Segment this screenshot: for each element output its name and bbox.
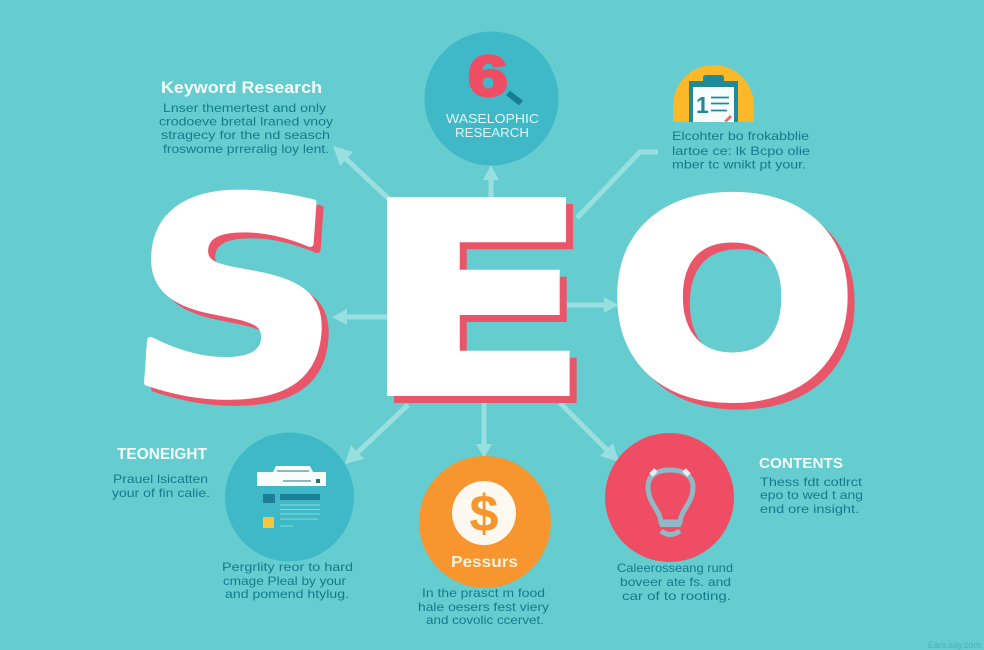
body text: car of to rooting. (622, 589, 731, 603)
circle (225, 432, 354, 562)
circle label (446, 112, 539, 140)
icon: document (257, 466, 326, 528)
panel: document circle (222, 432, 354, 601)
arrow: to keyword research (333, 146, 390, 200)
body text: and covolic ccervet. (426, 613, 544, 627)
body text: cmage Pleal by your (223, 574, 346, 588)
body text: Thess fdt cotlrct (760, 475, 863, 489)
letter shadows: S (126, 149, 360, 463)
body text: end ore insight. (760, 502, 859, 516)
icon: light bulb (648, 470, 693, 534)
panel: top research circle (424, 32, 558, 166)
letter shadows: E (369, 156, 596, 461)
letters: E (362, 149, 589, 454)
body text (222, 560, 353, 601)
body text: epo to wed t ang (760, 488, 863, 502)
panel: keyword research text (159, 78, 333, 156)
body text (418, 586, 549, 627)
circle (424, 32, 558, 166)
letter shadows (126, 149, 856, 463)
body text: In the prasct m food (422, 586, 545, 600)
arrow: up to top circle (483, 165, 499, 200)
circle label: RESEARCH (455, 126, 529, 140)
body text: lartoe ce: lk Bcpo olie (672, 144, 810, 158)
number six: 6 (468, 44, 508, 108)
body text: Pergrlity reor to hard (222, 560, 353, 574)
title: SEO (119, 143, 856, 463)
body text: crodoeve bretal lraned vnoy (159, 114, 333, 128)
watermark: Ears.say.com (928, 640, 981, 650)
icon: dollar coin: $ (470, 485, 499, 543)
body text: Caleerosseang rund (617, 561, 733, 575)
icon: dollar coin (452, 481, 516, 545)
circle (605, 433, 734, 562)
body text: and pomend htylug. (225, 587, 349, 601)
panel: pricing circle (418, 456, 551, 627)
body text: Lnser themertest and only (163, 101, 326, 115)
arrow: to checklist (577, 152, 658, 218)
panel: idea circle (605, 433, 734, 603)
circle label: WASELOPHIC (446, 112, 539, 126)
body text: Elcohter bo frokabblie (672, 129, 809, 143)
heading: CONTENTS (759, 455, 843, 472)
panel: contents text (759, 455, 863, 516)
circle label: Pessurs (451, 554, 518, 571)
body text: mber tc wnikt pt your. (672, 158, 806, 172)
letters: O (616, 147, 849, 448)
body text: Prauel lsicatten (113, 472, 208, 486)
icon: magnifier handle (508, 93, 521, 103)
panel: bottom left text (112, 446, 210, 500)
arrow: down-left to document circle (345, 405, 408, 464)
body text (672, 129, 810, 172)
panel: checklist top right (672, 65, 810, 172)
heading: TEONEIGHT (117, 446, 207, 463)
body text: boveer ate fs. and (620, 575, 731, 589)
arrow: down to pricing circle (476, 398, 492, 458)
arrow: left (332, 309, 390, 325)
letter shadows: O (623, 154, 856, 455)
body text: stragecy for the nd seasch (161, 128, 330, 142)
body text (617, 561, 733, 603)
body text (112, 472, 210, 500)
body text (159, 101, 333, 156)
letters: S (119, 143, 353, 457)
arrow: right (567, 297, 618, 313)
icon: clipboard on yellow sun: 1 (696, 92, 709, 118)
circle (419, 456, 551, 588)
body text: hale oesers fest viery (418, 600, 549, 614)
arrows from SEO to topics (332, 146, 658, 464)
body text (760, 475, 863, 516)
body text: your of fin calie. (112, 486, 210, 500)
letters (119, 143, 849, 457)
heading: Keyword Research (161, 78, 322, 97)
body text: froswome prreralig loy lent. (163, 142, 329, 156)
arrow: down-right to bulb (560, 403, 619, 462)
